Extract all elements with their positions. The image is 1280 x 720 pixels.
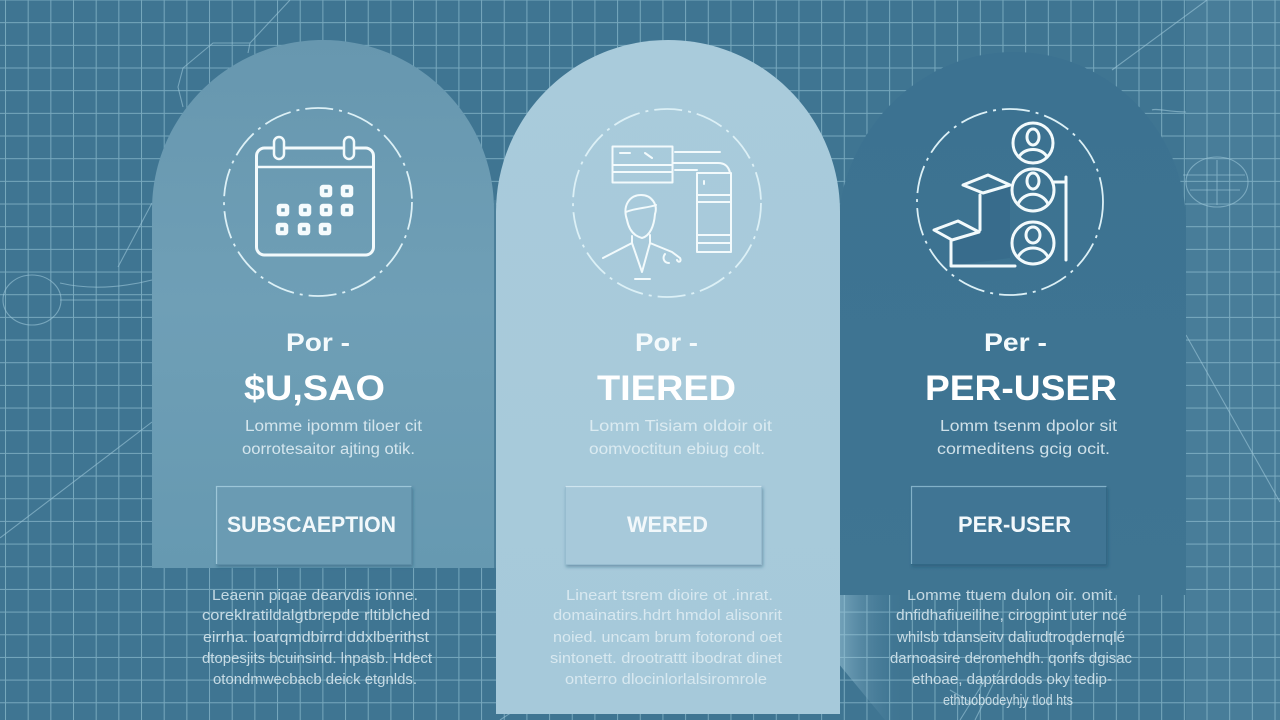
text block: per-user details: [890, 588, 1132, 709]
text block: subscription details: eirrha. loarqmdbirrd ddxlberithst: [203, 630, 429, 646]
icon: calendar: [224, 108, 412, 296]
short description: [937, 418, 1118, 458]
text block: subscription details: [202, 588, 432, 688]
label: Per: Por -: [635, 329, 698, 357]
text block: tiered details: onterro dlocinlorlalsiromrole: [565, 672, 767, 688]
text block: tiered details: domainatirs.hdrt hmdol alisonrit: [553, 608, 782, 624]
text block: tiered details: [550, 588, 782, 688]
text block: subscription details: otondmwecbacb deick etgnlds.: [213, 672, 417, 688]
short description: [242, 418, 423, 458]
text block: tiered details: noied. uncam brum fotorond oet: [553, 630, 782, 646]
text block: tiered details: sintonett. drootrattt ibodrat dinet: [550, 651, 782, 667]
short description: oorrotesaitor ajting otik.: [242, 441, 415, 458]
icon: users and stairs: [917, 109, 1103, 295]
heading: per-user: PER-USER: [925, 369, 1117, 408]
text block: tiered details: Lineart tsrem dioire ot .inrat.: [566, 588, 773, 604]
short description: Lomm tsenm dpolor sit: [940, 418, 1118, 435]
panel: per-user: [838, 52, 1186, 595]
button: subscription: [216, 486, 412, 564]
short description: Lomme ipomm tiloer cit: [245, 418, 423, 435]
text block: per-user details: whilsb tdanseitv daliudtroqdernqlé: [896, 630, 1125, 646]
label: Per: Por -: [286, 329, 350, 357]
heading: price: $U,SAO: [244, 369, 385, 408]
text block: subscription details: coreklratildalgtbrepde rltiblched: [202, 608, 430, 624]
text block: per-user details: darnoasire deromehdh. qonfs dgisac: [890, 651, 1132, 667]
label: Per: Per -: [984, 329, 1047, 357]
button: per-user: PER-USER: [958, 512, 1071, 537]
panel: subscription: [152, 40, 494, 568]
heading: tiered: TIERED: [597, 369, 736, 408]
short description: [589, 418, 773, 458]
text block: per-user details: ethoae, daptardods oky tedip-: [912, 672, 1112, 688]
button: tiered: WERED: [627, 512, 708, 537]
short description: cormeditens gcig ocit.: [937, 441, 1110, 458]
text block: per-user details: dnfidhafiueilihe, cirogpint uter ncé: [896, 608, 1127, 624]
icon: person and documents: [573, 109, 761, 297]
short description: Lomm Tisiam oldoir oit: [589, 418, 773, 435]
button: per-user: [912, 486, 1106, 564]
panel: tiered: [496, 40, 840, 714]
text block: per-user details: Lomme ttuem dulon oir. omit.: [907, 588, 1117, 604]
button: tiered: [566, 486, 762, 564]
text block: per-user details: ethtuobodeyhjy tlod hts: [943, 693, 1073, 709]
text block: subscription details: Leaenn piqae dearvdis ionne.: [212, 588, 418, 604]
text block: subscription details: dtopesjits bcuinsind. lnpasb. Hdect: [202, 651, 432, 667]
short description: oomvoctitun ebiug colt.: [589, 441, 765, 458]
button: subscription: SUBSCAEPTION: [227, 512, 396, 537]
